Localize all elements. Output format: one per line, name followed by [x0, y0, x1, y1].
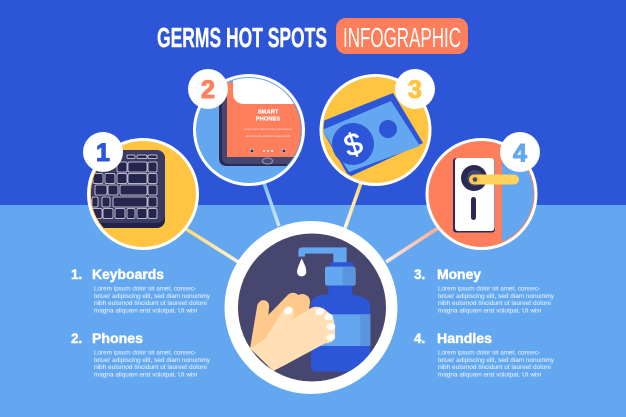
text block: 2 Phones: 2.	[71, 331, 82, 346]
title: GERMS HOT SPOTS	[157, 22, 327, 53]
circle 4: door handle	[426, 138, 538, 250]
badge 1: 1	[96, 139, 110, 167]
badge 3	[395, 69, 435, 109]
text block: 4 Handles: tetuer adipiscing elit, sed diam nonummy	[438, 357, 555, 364]
background: upper dark blue band	[0, 0, 626, 205]
text block: 4 Handles: 4.	[414, 331, 425, 346]
icon: banknote: $	[340, 125, 367, 164]
text block: 1 Keyboards: Keyboards	[92, 267, 164, 282]
icon: keyboard	[91, 150, 165, 228]
background: lower light blue band	[0, 205, 626, 417]
icon: phone: Lorem ipsum dolor sit amet, consectetuer	[244, 127, 292, 131]
badge 1	[83, 132, 123, 172]
text block: 3 Money: tetuer adipiscing elit, sed diam nonummy	[438, 293, 555, 300]
text block: 2 Phones: magna aliquam erat volutpat. Ut wisi	[94, 372, 197, 378]
central circle: hand washing	[224, 221, 398, 394]
badge 2: 2	[201, 76, 215, 104]
text block: 3 Money	[414, 267, 555, 314]
text block: 1 Keyboards: nibh euismod tincidunt ut laoreet dolore	[94, 300, 208, 307]
text block: 2 Phones	[71, 331, 211, 378]
text block: 4 Handles: nibh euismod tincidunt ut laoreet dolore	[438, 364, 552, 371]
icon: phone: adipiscing elit, sed diam nonummy nibh	[245, 134, 291, 138]
connector lines	[186, 183, 438, 263]
title: INFOGRAPHIC	[343, 22, 461, 53]
text block: 1 Keyboards: 1.	[71, 267, 82, 282]
text block: 3 Money: nibh euismod tincidunt ut laoreet dolore	[438, 300, 552, 307]
text block: 1 Keyboards: Lorem ipsum dolor sit amet, consec-	[94, 286, 196, 292]
text block: 2 Phones: Lorem ipsum dolor sit amet, consec-	[94, 350, 196, 356]
icon: phone: PHONES	[256, 116, 280, 122]
text block: 1 Keyboards: tetuer adipiscing elit, sed diam nonummy	[94, 293, 211, 300]
badge 2	[188, 69, 228, 109]
icon: handle	[453, 158, 534, 242]
text block: 3 Money: Money	[437, 267, 481, 282]
circle 3: money	[318, 76, 430, 184]
icon: hands	[250, 293, 336, 371]
text block: 3 Money: magna aliquam erat volutpat. Ut wisi	[438, 308, 541, 314]
text block: 1 Keyboards	[71, 267, 211, 314]
text block: 3 Money: 3.	[414, 267, 425, 282]
circle 1: keyboard	[70, 140, 198, 248]
text block: 2 Phones: Phones	[92, 331, 143, 346]
circle 2: phone	[193, 74, 305, 186]
text block: 2 Phones: nibh euismod tincidunt ut laoreet dolore	[94, 364, 208, 371]
text block: 4 Handles	[414, 331, 555, 378]
text block: 1 Keyboards: magna aliquam erat volutpat. Ut wisi	[94, 308, 197, 314]
badge 4	[500, 132, 540, 172]
icon: phone: SMART	[258, 110, 279, 116]
text block: 3 Money: Lorem ipsum dolor sit amet, consec-	[438, 286, 540, 292]
badge 3: 3	[408, 76, 422, 104]
text block: 4 Handles: Handles	[437, 331, 492, 346]
badge 4: 4	[513, 140, 527, 168]
icon: soap bottle	[297, 247, 370, 372]
text block: 4 Handles: magna aliquam erat volutpat. Ut wisi	[438, 372, 541, 378]
icon: phone	[219, 78, 301, 166]
text block: 4 Handles: Lorem ipsum dolor sit amet, consec-	[438, 350, 540, 356]
text block: 2 Phones: tetuer adipiscing elit, sed diam nonummy	[94, 357, 211, 364]
